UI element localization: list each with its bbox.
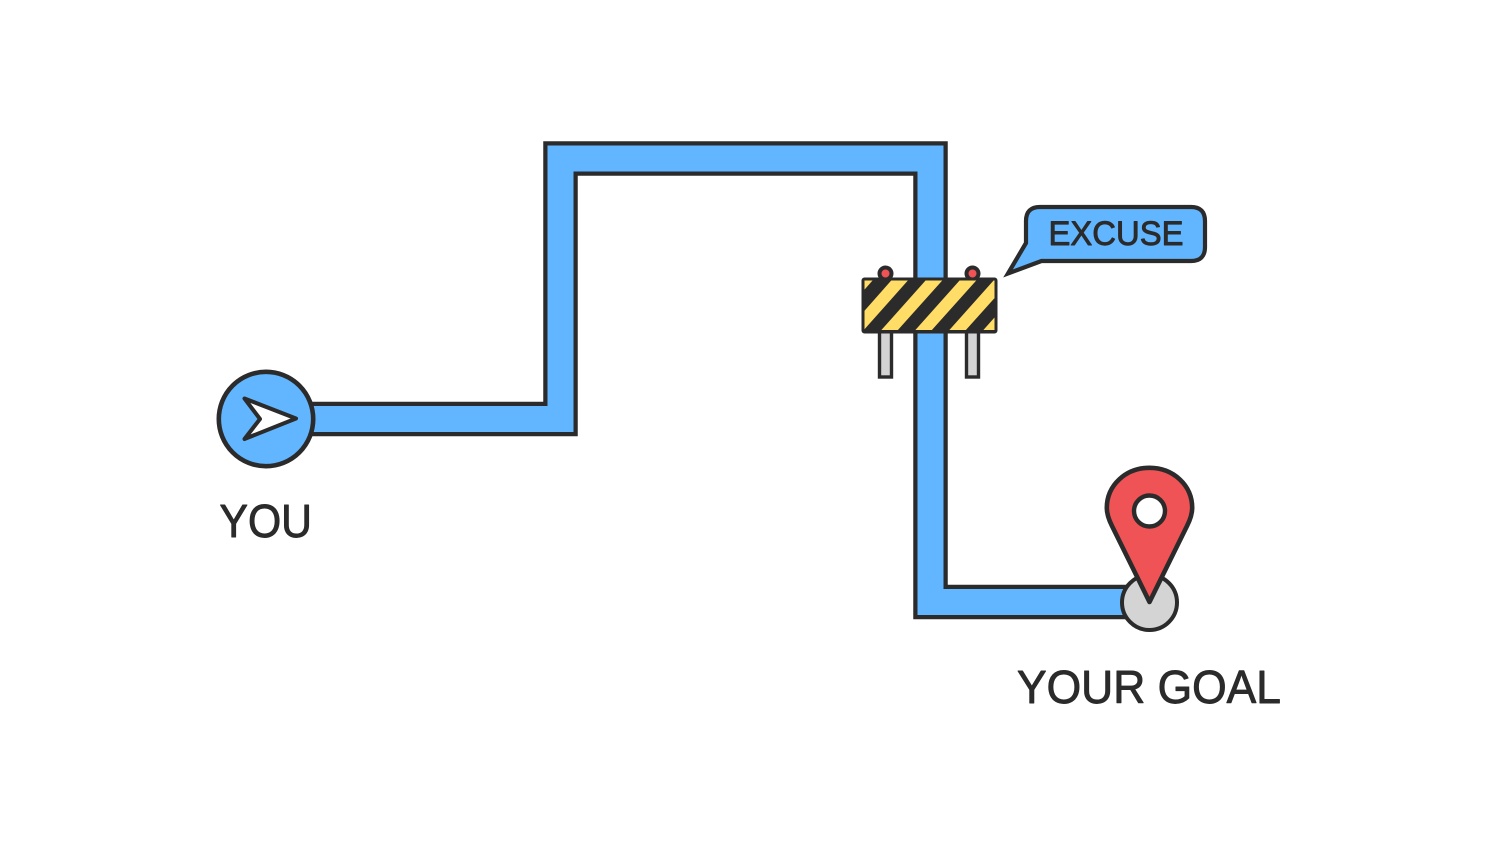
icon: goal base circle — [1122, 575, 1177, 630]
callout: excuse speech bubble: EXCUSE — [1048, 215, 1184, 253]
barrier lamps — [880, 268, 978, 280]
barrier posts — [880, 331, 978, 377]
icon: roadblock barrier — [862, 266, 998, 379]
diagram: path from you to your goal — [216, 141, 1280, 704]
barrier striped board — [862, 278, 998, 334]
label: your goal: YOUR GOAL — [1017, 661, 1281, 713]
label: you: YOU — [220, 495, 312, 547]
route: blue winding path — [266, 158, 1150, 602]
icon: start circle with navigation arrow — [219, 372, 313, 466]
callout: excuse speech bubble — [1008, 207, 1205, 274]
icon: red location pin — [1107, 468, 1192, 602]
